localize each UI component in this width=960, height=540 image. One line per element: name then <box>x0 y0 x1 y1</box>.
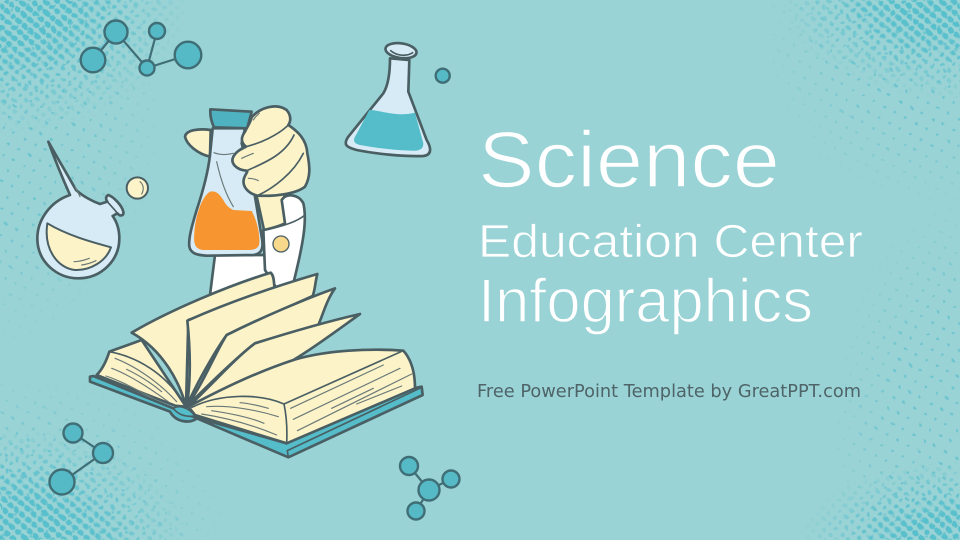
flask <box>189 128 263 256</box>
molecule: bottom left <box>50 424 113 494</box>
illustration: open book <box>90 273 423 457</box>
left page block <box>97 340 186 407</box>
icon: conical flask <box>346 41 430 156</box>
orange liquid <box>194 191 259 250</box>
icon: round flask <box>37 142 123 278</box>
illustration: hand holding flask <box>185 106 309 295</box>
title: Infographics: Infographics <box>478 267 813 336</box>
flask cap <box>210 109 252 128</box>
thumb <box>185 129 211 157</box>
right page block <box>188 350 415 443</box>
title: Science: Science <box>478 115 780 204</box>
sleeve and arm <box>210 193 305 295</box>
book cover <box>90 376 423 457</box>
spine <box>173 407 195 416</box>
turning pages <box>132 273 360 407</box>
fingers <box>232 106 309 196</box>
subtitle: Free PowerPoint Template by GreatPPT.com <box>477 381 861 402</box>
small bubble: cream <box>127 177 148 199</box>
molecule: top left <box>81 20 201 76</box>
title: Education Center: Education Center <box>478 215 863 267</box>
molecule: bottom right <box>400 457 460 520</box>
small bubble: teal <box>436 69 450 83</box>
